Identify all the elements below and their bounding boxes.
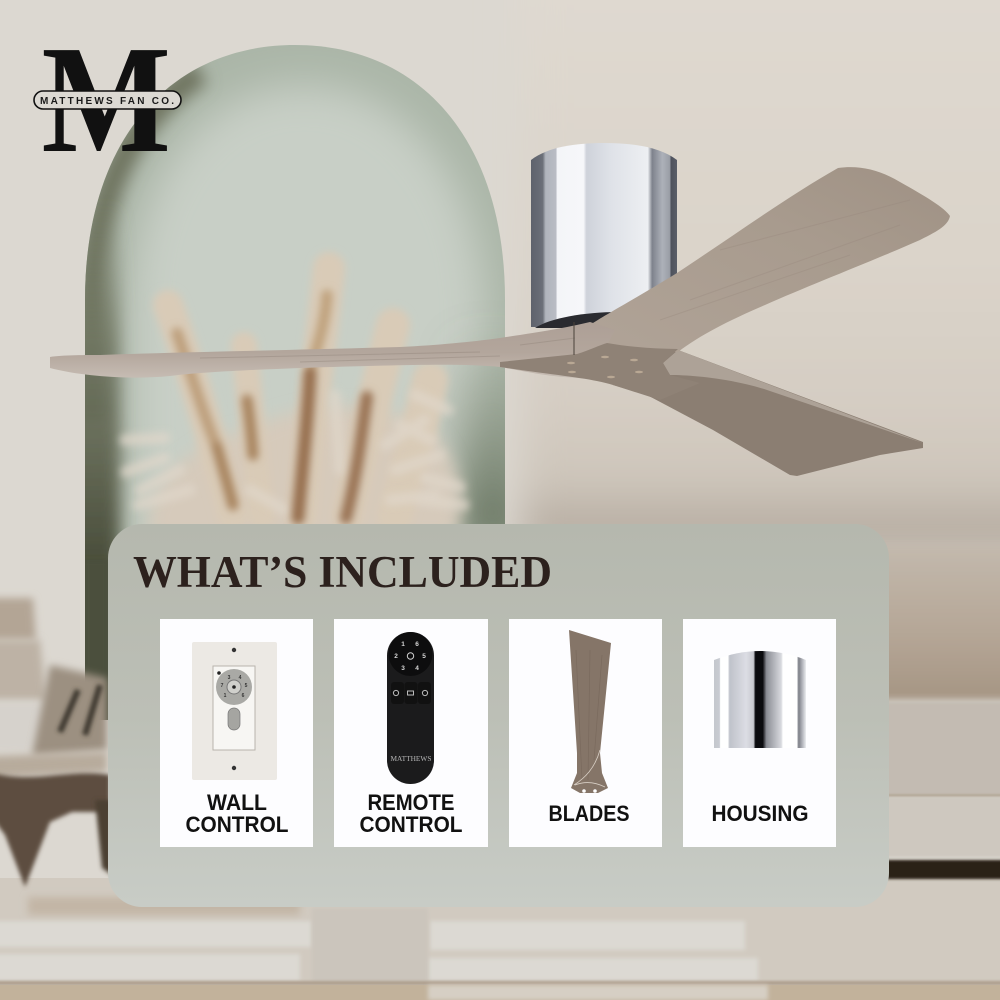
label: WALL	[207, 790, 267, 815]
label: CONTROL	[186, 812, 288, 837]
card: housing	[683, 619, 836, 847]
pampas brown cores	[177, 295, 367, 518]
icon: remote: MATTHEWS	[390, 755, 432, 763]
heading: WHAT’S INCLUDED	[133, 547, 552, 597]
fan hub with screws	[500, 322, 700, 400]
logo monogram M: M	[42, 14, 171, 185]
icon: remote: 3	[401, 665, 405, 672]
panel: what's included	[108, 524, 889, 907]
icon: remote: 5	[422, 653, 426, 660]
pampas pale plumes	[168, 268, 430, 515]
logo: Matthews Fan Co.	[34, 14, 181, 185]
fan blade: left	[50, 322, 615, 378]
icon: wall control: 3	[228, 675, 231, 681]
icon: remote: 2	[394, 653, 398, 660]
floor	[0, 860, 1000, 1000]
sofa on the right	[860, 545, 1000, 857]
icon: housing	[714, 651, 806, 748]
label: REMOTE	[368, 790, 454, 815]
logo name pill: MATTHEWS FAN CO.	[40, 96, 174, 107]
card: remote control	[334, 619, 488, 847]
pampas feathers	[125, 395, 464, 510]
label: HOUSING	[712, 801, 808, 826]
label: CONTROL	[360, 812, 462, 837]
armchair and throw blanket on the left	[0, 598, 112, 887]
icon: wall control: 1	[224, 693, 227, 699]
icon: wall control: 7	[221, 683, 224, 689]
arch niche	[85, 45, 505, 720]
card: wall control	[160, 619, 313, 847]
icon: remote: 6	[415, 641, 419, 648]
icon: blade	[569, 630, 611, 793]
pampas soft mass	[149, 407, 461, 540]
icon: remote	[387, 632, 434, 784]
label: BLADES	[548, 801, 630, 826]
chrome housing	[531, 143, 677, 328]
pampas grass	[125, 268, 464, 540]
icon: wall control: 4	[239, 675, 242, 681]
icon: remote: 1	[401, 641, 405, 648]
icon: wall control	[192, 642, 277, 780]
ceiling fan	[50, 143, 950, 476]
icon: wall control: 5	[245, 683, 248, 689]
card: blades	[509, 619, 662, 847]
fan blade: lower right	[613, 350, 923, 476]
fan blade: upper right	[590, 167, 950, 352]
icon: remote: 4	[415, 665, 419, 672]
icon: wall control: 6	[242, 693, 245, 699]
logo name pill	[34, 91, 181, 109]
